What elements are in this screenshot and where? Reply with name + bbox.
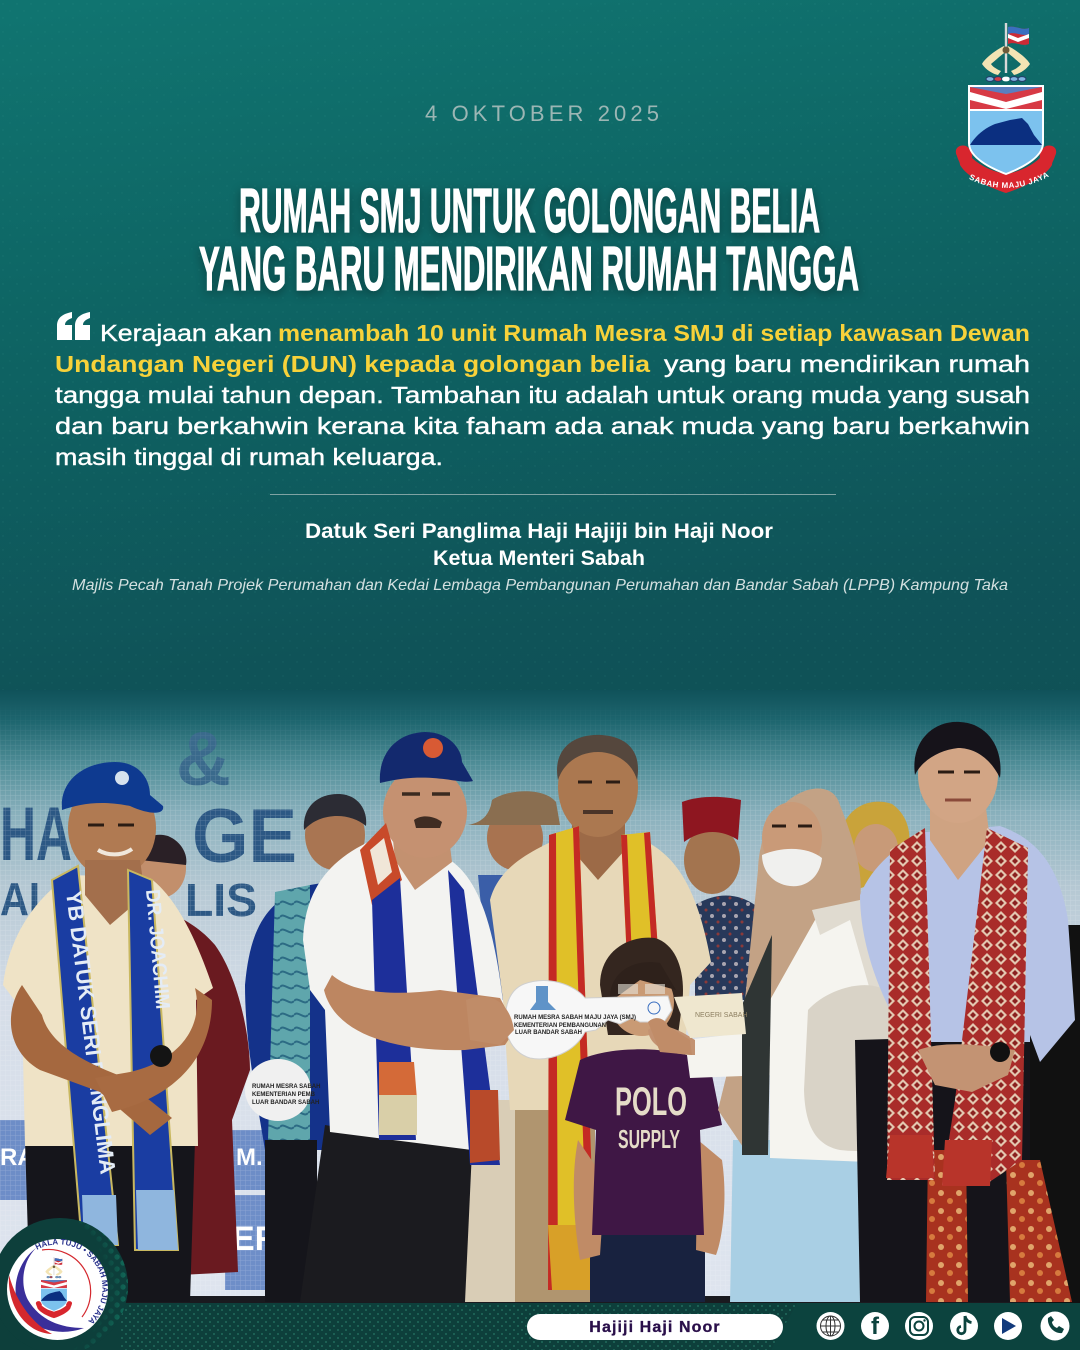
person: man in batik: [245, 794, 366, 1302]
icon: youtube: [994, 1312, 1022, 1340]
person: woman in yellow hijab: [840, 802, 909, 890]
stage screen: GE: [192, 794, 297, 879]
stage screen: LIS: [185, 874, 257, 926]
date: 4 OKTOBER 2025: [425, 101, 659, 126]
state crest: SABAH MAJU JAYA: [969, 172, 1049, 188]
quote text: [55, 320, 1030, 470]
floor: [0, 1296, 1080, 1310]
speaker attribution: Datuk Seri Panglima Haji Hajiji bin Haji Noor: [305, 520, 773, 543]
person: man with brown hat: [468, 791, 560, 1000]
small key held at left: RUMAH MESRA SABAH: [252, 1084, 320, 1090]
person: left man with blue cap: YB DATUK SERI PANGLIMA: [61, 890, 121, 1176]
person: woman in beige hijab: [648, 788, 938, 1302]
stage screen: &: [176, 717, 231, 802]
stage screen: AI: [0, 873, 40, 925]
state crest: [956, 23, 1056, 193]
speaker attribution: Majlis Pecah Tanah Projek Perumahan dan Kedai Lembaga Pembangunan Perumahan dan Bandar Sabah (LPPB) Kampung Taka: [72, 577, 1008, 594]
quote text: tangga mulai tahun depan. Tambahan itu adalah untuk orang muda yang susah: [55, 382, 1030, 408]
quote text: yang baru mendirikan rumah: [664, 351, 1030, 377]
footer bar: [0, 1303, 1080, 1350]
key handed over: [505, 981, 672, 1059]
person: right man in blue shirt: [855, 722, 1080, 1303]
certificate envelope: NEGERI SABAH: [695, 1012, 748, 1019]
key handed over: LUAR BANDAR SABAH: [515, 1029, 582, 1036]
social icons: [816, 1312, 1070, 1340]
person: main man in white shirt: [300, 732, 516, 1302]
person: man in songkok: [682, 797, 755, 1000]
title: [199, 177, 859, 304]
key handed over: KEMENTERIAN PEMBANGUNAN: [514, 1022, 606, 1029]
small key held at left: KEMENTERIAN PEMB: [252, 1092, 316, 1098]
stage screen: HA: [0, 792, 72, 877]
person: woman behind left: [130, 835, 250, 1275]
quote text: Undangan Negeri (DUN) kepada golongan belia: [55, 351, 650, 377]
name pill: Hajiji Haji Noor: [589, 1319, 721, 1336]
circular badge: HALA TUJU • SABAH MAJU JAYA: [35, 1238, 108, 1324]
icon: facebook: f: [871, 1313, 880, 1340]
stage screen: ER: [232, 1220, 279, 1258]
quote mark: [57, 312, 90, 340]
speaker attribution: Ketua Menteri Sabah: [433, 547, 645, 570]
key handed over: RUMAH MESRA SABAH MAJU JAYA (SMJ): [514, 1014, 636, 1021]
person: left man with blue cap: DR. JOACHIM: [141, 889, 173, 1010]
small key held at left: LUAR BANDAR SABAH: [252, 1100, 319, 1106]
quote text: menambah 10 unit Rumah Mesra SMJ di setiap kawasan Dewan: [278, 320, 1030, 346]
quote text: masih tinggal di rumah keluarga.: [55, 444, 443, 470]
icon: instagram: [905, 1312, 933, 1340]
stage screen: [0, 690, 1080, 1305]
speaker attribution: [72, 520, 1008, 594]
person: child in purple shirt: POLO: [615, 1080, 687, 1124]
circular badge: [0, 1218, 128, 1349]
icon: phone: [1040, 1312, 1070, 1340]
name pill: [527, 1314, 783, 1340]
small key held at left: [245, 1059, 320, 1121]
hands on key: [466, 997, 692, 1055]
icon: tiktok: [950, 1312, 978, 1340]
icon: facebook: [861, 1312, 889, 1340]
person: child in purple shirt: [565, 938, 724, 1302]
stage screen: M.: [236, 1144, 263, 1171]
icon: website: [816, 1312, 844, 1340]
person: older man with yellow sash: [465, 735, 711, 1302]
event photo: [0, 690, 1080, 1310]
quote text: dan baru berkahwin kerana kita faham ada anak muda yang baru berkahwin: [55, 413, 1030, 439]
person: child in purple shirt: SUPPLY: [618, 1124, 680, 1154]
stage screen: RA: [0, 1144, 35, 1171]
quote text: Kerajaan akan: [100, 320, 272, 346]
certificate envelope: [674, 993, 748, 1038]
person: left man with blue cap: [3, 762, 213, 1302]
